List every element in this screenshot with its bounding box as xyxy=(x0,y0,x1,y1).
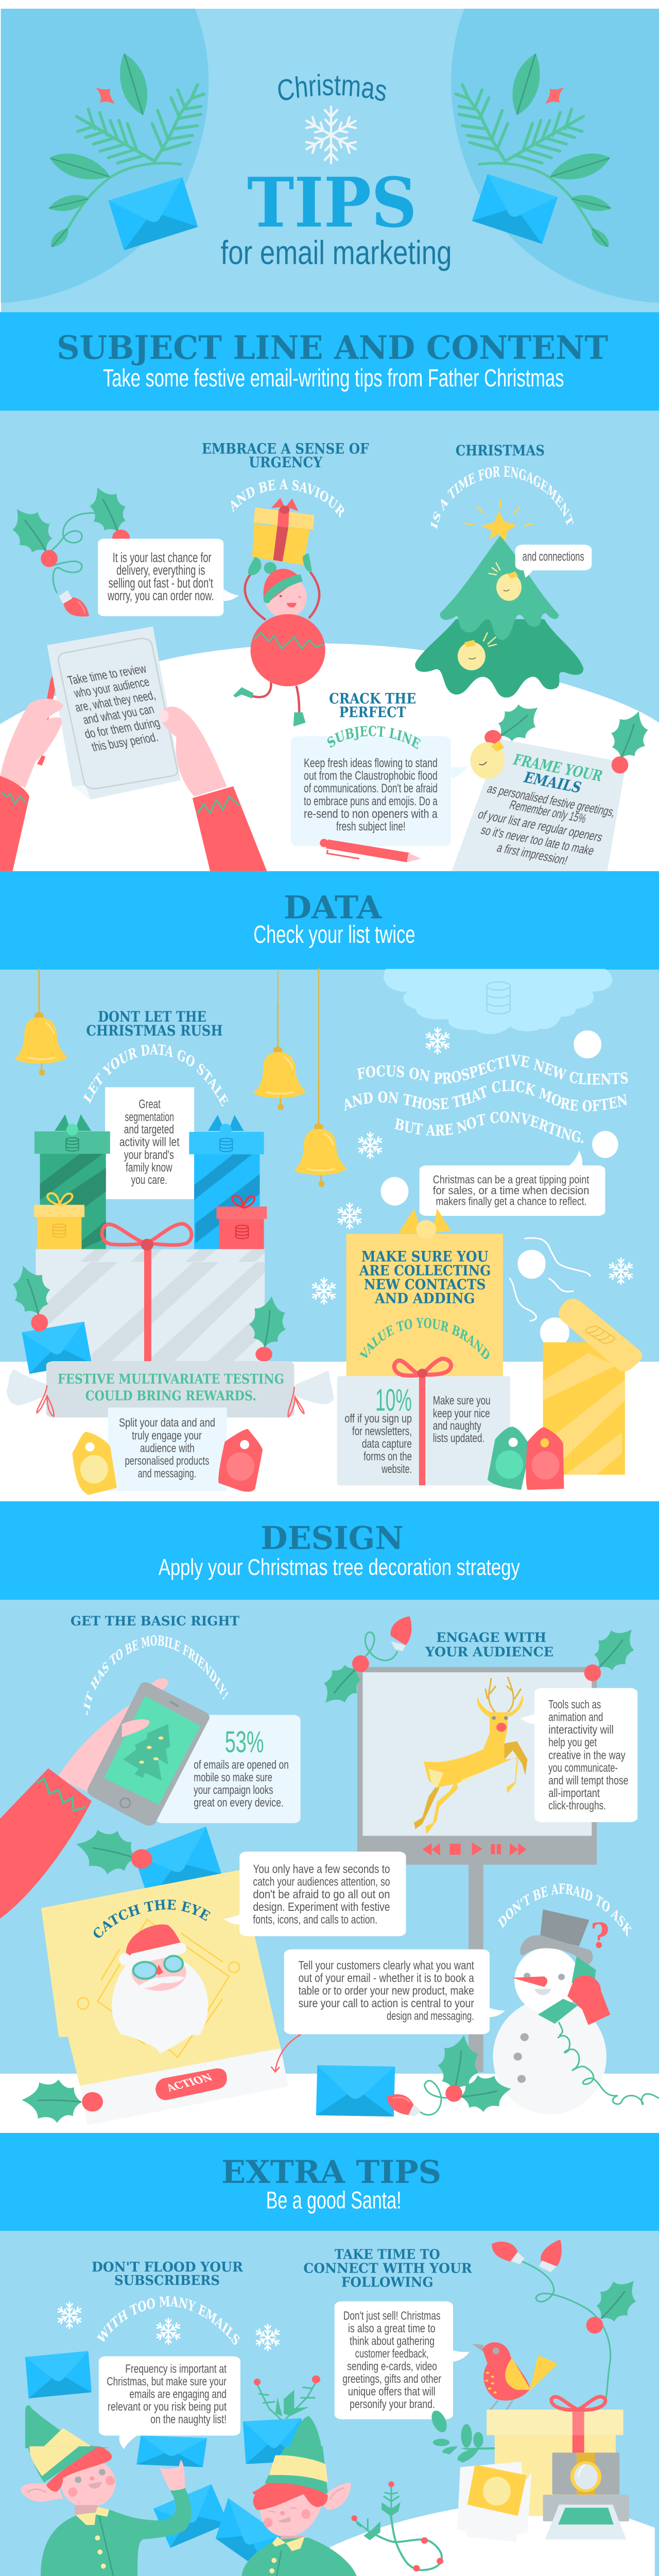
panel: video player screen xyxy=(357,1667,597,2038)
heading: take time to connect with your following: TAKE TIME TO xyxy=(335,2247,440,2262)
panel: 53 percent stat: of emails are opened on xyxy=(194,1758,289,1771)
snowflakes xyxy=(57,2302,280,2350)
banner: festive multivariate testing: FESTIVE MULTIVARIATE TESTING xyxy=(58,1371,284,1387)
icon: cloud with database xyxy=(384,969,612,1034)
panel: subject line tip: of communications. Don't be afraid xyxy=(304,782,438,795)
speech bubble: tipping point xyxy=(420,1150,605,1216)
panel: value gift box: for newsletters, xyxy=(352,1425,412,1438)
heading: embrace a sense of urgency xyxy=(202,440,369,470)
icon: envelope and holly xyxy=(71,1822,221,1902)
icon: pen xyxy=(320,839,421,862)
panel: subject line tip: to embrace puns and emojis. Do a xyxy=(304,794,438,808)
curved text: value to your brand: VALUE TO YOUR BRAND xyxy=(359,1318,489,1359)
band: extra tips: EXTRA TIPS xyxy=(221,2154,441,2191)
hand-written list on paper: Take time to review xyxy=(66,662,148,688)
panel: 53 percent stat: great on every device. xyxy=(194,1796,284,1809)
panel: 53 percent stat: your campaign looks xyxy=(194,1783,273,1797)
panel: subject line tip: Keep fresh ideas flowing to stand xyxy=(304,756,438,770)
panel: segmentation text: and targeted xyxy=(124,1123,174,1137)
heading: dont let the christmas rush xyxy=(86,1009,223,1039)
panel: value gift box: 10% xyxy=(375,1383,412,1417)
speech bubble: connect: think about gathering xyxy=(350,2334,435,2348)
heading: embrace a sense of urgency: EMBRACE A SENSE OF xyxy=(202,440,369,457)
panel: split your data: and messaging. xyxy=(138,1467,196,1480)
icon: blue gift xyxy=(189,1115,264,1249)
panel: segmentation text: you care. xyxy=(131,1173,167,1187)
character: christmas tree with baubles xyxy=(415,499,583,698)
heading: take time to connect with your following xyxy=(303,2247,472,2290)
left foliage decoration xyxy=(48,54,204,247)
band: subject line and content xyxy=(57,328,608,392)
text: Check your list twice xyxy=(253,921,415,948)
panel: yellow gift lid heading xyxy=(346,1209,503,1377)
panel: subject line section xyxy=(0,440,659,871)
icon: big grey gift xyxy=(36,1224,265,1363)
panel: data section xyxy=(6,968,643,1495)
icon: player corner hollies xyxy=(313,1618,646,1714)
heading: take time to connect with your following: FOLLOWING xyxy=(341,2274,433,2290)
illustration: bird xyxy=(472,2342,558,2413)
icon: open yellow box xyxy=(540,1299,642,1475)
character: left elf xyxy=(21,2405,192,2576)
panel: value gift box: data capture xyxy=(362,1437,412,1450)
band: data: DATA xyxy=(284,889,382,926)
speech bubble: frequency: Frequency is important at xyxy=(125,2362,227,2376)
hand-written list on paper: and what you can xyxy=(81,702,156,727)
heading: christmas: CHRISTMAS xyxy=(456,442,545,459)
icon: envelope and holly behind cracker xyxy=(6,1260,290,1374)
icon: right bell xyxy=(294,968,346,1187)
heading: embrace a sense of urgency: URGENCY xyxy=(249,454,323,470)
icon: snowflake xyxy=(303,107,359,163)
illustration: sprig with berries xyxy=(351,2481,443,2571)
panel: value gift box: off if you sign up xyxy=(344,1412,412,1426)
icon: holly on left of ground xyxy=(21,2078,103,2124)
panel: yellow gift lid heading: NEW CONTACTS xyxy=(364,1277,486,1293)
right foliage decoration xyxy=(456,54,612,247)
hand-written list on paper: do for them during xyxy=(83,716,162,741)
panel: value gift box: lists updated. xyxy=(433,1432,484,1445)
panel: value gift box: website. xyxy=(381,1463,412,1476)
heading: don't flood your subscribers: DON'T FLOOD YOUR xyxy=(92,2259,243,2275)
speech bubble: connect: personify your brand. xyxy=(350,2397,435,2411)
speech bubble: last chance: It is your last chance for xyxy=(113,550,212,565)
panel: split your data xyxy=(108,1408,227,1491)
curved text: with too many emails: WITH TOO MANY EMAILS xyxy=(97,2296,240,2345)
panel: data section: personalised products xyxy=(125,1454,210,1467)
band: extra tips xyxy=(221,2154,441,2214)
heading: crack the perfect: PERFECT xyxy=(339,704,406,720)
heading: engage with your audience xyxy=(425,1630,553,1660)
header side curtains xyxy=(1,9,659,303)
panel: segmentation text: your brand's xyxy=(124,1148,174,1162)
speech bubble: connect: is also a great time to xyxy=(348,2321,436,2335)
panel: frame your emails: EMAILS xyxy=(521,769,584,796)
wavy text: and on those that click more often: AND ON THOSE THAT CLICK MORE OFTEN xyxy=(344,1080,627,1112)
illustration: camera and photos xyxy=(457,2453,629,2542)
panel: split your data: audience with xyxy=(140,1442,195,1455)
speech bubble: tools xyxy=(521,1688,637,1822)
character: right elf xyxy=(241,2416,357,2576)
panel: header xyxy=(1,8,659,303)
panel: subject line tip: re-send to non openers with a xyxy=(304,807,438,821)
icon: left envelope xyxy=(109,177,198,250)
icons: green and red tags xyxy=(488,1427,564,1490)
icon: holly, wire and bulb xyxy=(2,480,134,617)
speech bubble: tell your customers: design and messaging. xyxy=(387,2009,474,2023)
heading: crack the perfect: CRACK THE xyxy=(329,690,416,707)
speech bubble: tell your customers: table or to order your new product, make xyxy=(299,1984,474,1997)
curved text: and be a saviour: AND BE A SAVIOUR xyxy=(231,479,344,518)
curved text: catch the eye: CATCH THE EYE xyxy=(94,1900,211,1938)
speech bubble: connect: greetings, gifts and other xyxy=(342,2372,441,2385)
panel: subject line tip: out from the Claustrophobic flood xyxy=(304,769,438,783)
banner: festive multivariate testing: COULD BRING REWARDS. xyxy=(85,1387,256,1403)
icons: flying envelopes xyxy=(136,2418,304,2576)
icon: right envelope xyxy=(472,174,558,244)
icon: green gift xyxy=(34,1114,110,1249)
speech bubble: tell your customers: out of your email - whether it is to book a xyxy=(299,1971,474,1985)
character: snowman on phone: ? xyxy=(591,1916,610,1956)
panel: segmentation text: Great xyxy=(138,1097,161,1111)
snow hill xyxy=(0,643,659,871)
panel: frame your emails: a first impression! xyxy=(495,841,570,868)
panel: data section: Split your data and and xyxy=(119,1416,215,1430)
speech bubble: connect: unique offers that will xyxy=(348,2384,436,2398)
speech bubble: few seconds: catch your audiences attention, so xyxy=(253,1875,390,1888)
band: data xyxy=(253,889,415,948)
panel: 53 percent stat xyxy=(155,1715,301,1823)
snowflakes xyxy=(311,1028,633,1304)
speech bubble: few seconds: fonts, icons, and calls to action. xyxy=(253,1913,377,1926)
icons: yellow and red tags xyxy=(72,1429,263,1495)
speech bubble: frequency xyxy=(99,2356,240,2449)
icon: bulbs, string and holly xyxy=(492,2240,648,2400)
wavy text: focus on prospective new clients: FOCUS ON PROSPECTIVE NEW CLIENTS xyxy=(357,1054,628,1085)
icon: envelope left xyxy=(25,2351,92,2398)
hand-written list on paper xyxy=(37,626,181,800)
panel: yellow gift lid heading: AND ADDING xyxy=(374,1291,475,1307)
panel: catch the eye card xyxy=(41,1870,288,2125)
illustration: yellow gift xyxy=(442,2397,623,2516)
panel: segmentation text: activity will let xyxy=(119,1136,180,1149)
heading: dont let the christmas rush: DONT LET THE xyxy=(98,1009,206,1025)
speech bubble: and connections: and connections xyxy=(523,549,584,564)
heading: don't flood your subscribers: SUBSCRIBERS xyxy=(114,2273,220,2289)
panel: yellow gift lid heading: MAKE SURE YOU xyxy=(361,1249,489,1265)
speech bubble: tools: help you get xyxy=(548,1735,597,1749)
heading: crack the perfect xyxy=(329,690,416,720)
speech bubble: tell your customers xyxy=(284,1950,505,2034)
icon: left bell xyxy=(15,969,67,1076)
panel: extra tips section xyxy=(21,2239,655,2576)
panel: split your data: truly engage your xyxy=(132,1429,202,1443)
icon: small yellow gift xyxy=(34,1193,84,1249)
panel: design section xyxy=(0,1614,659,2125)
button: action xyxy=(155,2069,227,2100)
panel: 53 percent stat: 53% xyxy=(225,1725,264,1759)
speech bubble: few seconds xyxy=(223,1852,406,1936)
hand-written list on paper: this busy period. xyxy=(90,730,160,754)
speech bubble: last chance xyxy=(98,539,239,616)
speech bubble: last chance: selling out fast - but don't xyxy=(109,575,213,590)
heading: engage with your audience: YOUR AUDIENCE xyxy=(425,1645,553,1660)
illustration: hand holding phone xyxy=(0,1676,210,1919)
title: Christmas: Christmas xyxy=(278,74,386,101)
speech bubble: tell your customers: Tell your customers clearly what you want xyxy=(299,1958,474,1972)
speech bubble: frequency: on the naughty list! xyxy=(150,2413,227,2426)
speech bubble: last chance: delivery, everything is xyxy=(116,563,205,578)
white faces xyxy=(381,1030,618,1206)
panel: value gift box xyxy=(337,1359,510,1485)
character: elf holding gift xyxy=(233,498,325,726)
heading: get the basic right: GET THE BASIC RIGHT xyxy=(71,1614,239,1629)
panel: value gift box: keep your nice xyxy=(433,1407,490,1420)
hand-written list on paper: who your audience xyxy=(72,675,151,701)
speech bubble: tell your customers: sure your call to action is central to your xyxy=(299,1996,474,2010)
arrow: to action xyxy=(271,2027,324,2072)
panel: segmentation text xyxy=(105,1087,194,1199)
panel: 53 percent stat: mobile so make sure xyxy=(194,1771,272,1784)
hand-written list on paper: are, what they need, xyxy=(73,688,158,715)
panel: subject line tip xyxy=(291,736,467,846)
curved text: let your data go stale: LET YOUR DATA GO STALE xyxy=(83,1044,229,1107)
banner: festive multivariate testing xyxy=(6,1361,334,1417)
speech bubble: and connections xyxy=(515,545,592,578)
speech bubble: frequency: Christmas, but make sure your xyxy=(107,2375,227,2388)
speech bubble: connect: customer feedback, xyxy=(355,2347,429,2360)
panel: segmentation text: segmentation xyxy=(125,1110,174,1124)
wavy text: but are not converting: BUT ARE NOT CONVERTING. xyxy=(394,1111,583,1143)
heading: don't flood your subscribers xyxy=(92,2259,243,2289)
panel: value gift box: forms on the xyxy=(363,1450,412,1463)
band: extra tips: Be a good Santa! xyxy=(266,2187,402,2214)
panel: subject line tip: fresh subject line! xyxy=(336,820,406,834)
speech bubble: few seconds: You only have a few seconds to xyxy=(253,1862,390,1876)
speech bubble: few seconds: design. Experiment with festive xyxy=(253,1900,390,1913)
speech bubble: few seconds: don't be afraid to go all out on xyxy=(253,1888,390,1901)
band: design xyxy=(159,1520,520,1580)
speech bubble: frequency: relevant or you risk being put xyxy=(108,2400,227,2413)
curved text: subject line: SUBJECT LINE xyxy=(327,725,421,749)
icon: bulb and string xyxy=(361,1616,411,1660)
character: santa xyxy=(112,1924,208,2054)
heading: take time to connect with your following: CONNECT WITH YOUR xyxy=(303,2261,472,2276)
illustration: reindeer xyxy=(414,1677,527,1835)
icon: small red gift xyxy=(216,1196,267,1249)
panel: frame your emails xyxy=(452,694,656,871)
curved text: it has to be mobile friendly: -IT HAS TO BE MOBILE FRIENDLY! xyxy=(84,1635,228,1716)
title: TIPS: TIPS xyxy=(247,162,417,243)
button: action: ACTION xyxy=(163,2071,215,2094)
speech bubble: connect: Don't just sell! Christmas xyxy=(343,2309,440,2323)
panel: value gift box: and naughty xyxy=(433,1419,481,1432)
hands and sleeves xyxy=(0,699,267,871)
character: snowman on phone xyxy=(469,1909,659,2114)
illustration: plant sprig xyxy=(254,2376,320,2420)
heading: dont let the christmas rush: CHRISTMAS RUSH xyxy=(86,1023,223,1039)
band: design: DESIGN xyxy=(261,1520,404,1557)
speech bubble: connect xyxy=(335,2301,470,2419)
panel: value gift box: Make sure you xyxy=(433,1394,491,1407)
icon: blue envelope on ground xyxy=(316,2065,395,2116)
speech bubble: tools: all-important xyxy=(548,1786,600,1800)
curved text: don't be afraid to ask: DON'T BE AFRAID TO ASK xyxy=(498,1884,632,1937)
speech bubble: last chance: worry, you can order now. xyxy=(107,588,214,603)
icon: bulb, holly and string on ground xyxy=(387,2031,514,2116)
white squiggles xyxy=(509,1238,591,1321)
speech bubble: frequency: emails are engaging and xyxy=(129,2387,227,2401)
heading: engage with your audience: ENGAGE WITH xyxy=(436,1630,546,1646)
illustration: leafy plant xyxy=(429,2410,483,2448)
icon: middle bell xyxy=(253,970,306,1110)
speech bubble: connect: sending e-cards, video xyxy=(347,2360,437,2373)
curved text: is a time for engagement: IS A TIME FOR ENGAGEMENT xyxy=(430,466,574,530)
panel: yellow gift lid heading: ARE COLLECTING xyxy=(359,1263,491,1279)
white ground hill xyxy=(330,2508,655,2576)
panel: segmentation text: family know xyxy=(126,1161,172,1175)
